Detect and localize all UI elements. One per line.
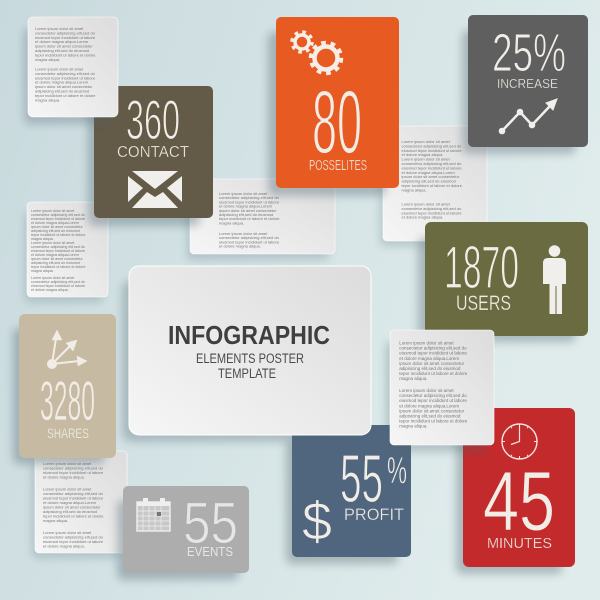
note: left middle: eiusmod tepor incididunt ut labore: [31, 217, 85, 221]
number: 55: 55: [340, 441, 383, 517]
note: left middle: et dolore magna aliqua.Lorem: [31, 221, 79, 225]
note: right top: eiusmod tepor incididunt ut labore: [402, 148, 462, 153]
note: lower left: adipisicing elit,sed do eiusmod: [43, 509, 97, 514]
card: 45 minutes: [456, 408, 575, 574]
note: left middle: Lorem ipsum dolor sit amet: [31, 241, 74, 245]
card: 55% profit: [286, 425, 411, 564]
note: top left: Lorem ipsum dolor sit amet: [35, 26, 84, 31]
note: lower right panel: consectetur adipisicing elit,sed do: [399, 393, 467, 398]
note: lower right panel: Lorem ipsum dolor sit amet: [399, 388, 454, 393]
note: lower right panel: eiusmod tepor incididunt ut labore: [399, 351, 467, 356]
card: 80 posselites: [268, 17, 399, 196]
note: right top: et dolore magna aliqua.: [402, 152, 443, 157]
note: lower left: consectetur adipisicing elit,sed do: [43, 466, 104, 470]
note: lower right panel: adipisicing elit,sed do eiusmod: [399, 414, 461, 418]
note: lower left: Lorem ipsum dolor sit amet: [43, 461, 92, 466]
note: top left: ipsum dolor sit amet consectetur: [35, 84, 93, 89]
icon: branching arrows: [48, 330, 87, 368]
note: lower right panel: Lorem ipsum dolor sit amet: [399, 340, 454, 346]
note: right top: [380, 126, 487, 246]
note: left middle: tepor incididunt ut labore et dolore: [31, 265, 85, 269]
note: centre top: ipsum dolor sit amet consectetur: [219, 208, 277, 213]
note: left middle: Lorem ipsum dolor sit amet: [31, 209, 74, 213]
note: centre top: tepor incididunt ut labore et dolore: [219, 216, 280, 221]
number: 45: 45: [483, 454, 555, 548]
note: lower left: magna aliqua.: [43, 518, 68, 523]
note: right top: ipsum dolor sit amet consectetur: [402, 174, 460, 179]
note: lower left: et dolore magna aliqua.Lorem: [43, 500, 97, 505]
note: left middle: adipisicing elit,sed do eiusmod: [31, 261, 80, 265]
note: top left: ipsum dolor sit amet consectetur: [35, 44, 93, 49]
number: 1870: 1870: [444, 234, 519, 301]
icon: person: [543, 245, 566, 314]
card: 3280 shares: 3280: [40, 369, 95, 432]
note: centre top: Lorem ipsum dolor sit amet: [219, 231, 268, 236]
icon: dollar: $: [302, 492, 332, 552]
label: shares: SHARES: [47, 425, 89, 441]
note: right top: Lorem ipsum dolor sit amet: [402, 139, 451, 144]
note: left middle: ipsum dolor sit amet consectetur: [31, 225, 84, 229]
note: lower right panel: magna aliqua.: [399, 424, 428, 429]
icon: gears: [292, 32, 341, 73]
note: centre top: consectetur adipisicing elit,sed do: [219, 235, 280, 240]
note: lower right panel: eiusmod tepor incididunt ut labore: [399, 398, 467, 403]
note: lower left: eiusmod tepor incididunt ut labore: [43, 470, 104, 475]
card: 25% increase: [462, 15, 588, 154]
note: left middle: et dolore magna aliqua.: [31, 288, 69, 292]
label: events: EVENTS: [187, 545, 233, 559]
note: top left: consectetur adipisicing elit,sed do: [35, 30, 96, 35]
note: right top: adipisicing elit,sed do eiusmod: [402, 179, 456, 184]
note: left middle: magna aliqua.: [31, 237, 54, 241]
note: lower left: tepor incididunt ut labore et dolore: [43, 514, 104, 518]
icon: envelope: [128, 171, 182, 208]
note: right top: et dolore magna aliqua.Lorem: [402, 170, 455, 175]
note: centre top: magna aliqua.: [219, 220, 244, 225]
label: contact: CONTACT: [117, 144, 190, 161]
note: left middle: [25, 202, 108, 302]
icon: calendar: [137, 498, 170, 531]
note: top left: tepor incididunt ut labore et dolore: [35, 93, 96, 98]
card: 80 posselites: 80: [312, 73, 362, 173]
note: left middle: consectetur adipisicing elit,sed do: [31, 213, 85, 217]
note: lower left: consectetur adipisicing elit,sed do: [43, 534, 104, 540]
note: centre top: Lorem ipsum dolor sit amet: [219, 191, 268, 196]
note: top left: adipisicing elit,sed do eiusmod: [35, 48, 89, 53]
note: right top: et dolore magna aliqua.: [402, 215, 443, 220]
note: top left: consectetur adipisicing elit,sed do: [35, 71, 96, 76]
note: lower right panel: tepor incididunt ut labore et dolore: [399, 419, 468, 424]
note: lower left: eiusmod tepor incididunt ut labore: [43, 496, 104, 500]
note: top left: magna aliqua.: [35, 97, 60, 102]
note: lower left: et dolore magna aliqua.: [43, 544, 85, 548]
note: left middle: eiusmod tepor incididunt ut labore: [31, 249, 85, 253]
note: lower right panel: consectetur adipisicing elit,sed do: [399, 346, 467, 351]
note: centre top: eiusmod tepor incididunt ut labore: [219, 239, 280, 244]
note: centre top: et dolore magna aliqua.Lorem: [219, 204, 273, 209]
card: 1870 users: [418, 222, 588, 342]
note: left middle: adipisicing elit,sed do eiusmod: [31, 229, 80, 233]
subheading line two: TEMPLATE: [218, 366, 276, 381]
note: right top: consectetur adipisicing elit,sed do: [402, 206, 462, 211]
note: lower right panel: tepor incididunt ut labore et dolore: [399, 371, 468, 376]
note: lower left: et dolore magna aliqua.: [43, 474, 85, 480]
note: lower left: [32, 451, 127, 558]
note: right top: consectetur adipisicing elit,sed do: [402, 143, 462, 148]
note: lower right panel: et dolore magna aliqua.Lorem: [399, 356, 459, 361]
subheading line one: ELEMENTS POSTER: [196, 351, 304, 366]
label: users: USERS: [456, 292, 511, 315]
note: top left: et dolore magna aliqua.Lorem: [35, 80, 89, 85]
note: top left: et dolore magna aliqua.Lorem: [35, 39, 89, 44]
note: right top: Lorem ipsum dolor sit amet: [402, 157, 451, 162]
note: left middle: ipsum dolor sit amet consectetur: [31, 257, 84, 261]
note: top left: eiusmod tepor incididunt ut labore: [35, 75, 96, 80]
icon: clock: [502, 424, 537, 459]
note: lower left: ipsum dolor sit amet consectetur: [43, 504, 101, 510]
heading: INFOGRAPHIC: [168, 320, 330, 350]
note: top left: Lorem ipsum dolor sit amet: [35, 66, 84, 72]
note: right top: tepor incididunt ut labore et dolore: [402, 183, 463, 188]
note: lower left: Lorem ipsum dolor sit amet: [43, 530, 92, 535]
note: lower right panel: adipisicing elit,sed do eiusmod: [399, 366, 461, 371]
note: top left: magna aliqua.: [35, 57, 60, 62]
note: centre top: [187, 179, 335, 260]
note: lower right panel: et dolore magna aliqua.Lorem: [399, 403, 459, 408]
icon: rising line arrow: [499, 99, 557, 134]
card: 360 contact: [88, 86, 213, 226]
note: lower right panel: ipsum dolor sit amet consectetur: [399, 408, 465, 413]
number: 360: 360: [126, 88, 180, 151]
label: minutes: MINUTES: [487, 535, 552, 552]
label: posselites: POSSELITES: [309, 157, 367, 174]
label: profit: PROFIT: [344, 505, 404, 524]
number: 25%: 25%: [492, 23, 566, 83]
note: right top: consectetur adipisicing elit,sed do: [402, 161, 462, 166]
note: centre top: eiusmod tepor incididunt ut labore: [219, 199, 280, 204]
card: 3280 shares: [13, 314, 116, 464]
note: centre top: adipisicing elit,sed do eiusmod: [219, 212, 273, 217]
note: top left: adipisicing elit,sed do eiusmod: [35, 88, 89, 94]
note: left middle: tepor incididunt ut labore et dolore: [31, 233, 85, 237]
note: left middle: et dolore magna aliqua.Lorem: [31, 253, 79, 257]
note: centre top: et dolore magna aliqua.: [219, 244, 261, 249]
note: lower left: eiusmod tepor incididunt ut labore: [43, 539, 104, 544]
label: increase: INCREASE: [497, 76, 558, 91]
card: 55 events: [117, 486, 249, 580]
note: left middle: Lorem ipsum dolor sit amet: [31, 276, 74, 280]
note: right top: eiusmod tepor incididunt ut labore: [402, 210, 462, 215]
note: top left: eiusmod tepor incididunt ut labore: [35, 35, 96, 40]
note: lower left: Lorem ipsum dolor sit amet: [43, 486, 92, 492]
note: right top: magna aliqua.: [402, 187, 427, 192]
note: left middle: consectetur adipisicing elit,sed do: [31, 245, 85, 249]
percent sign: %: [387, 450, 407, 492]
note: left middle: consectetur adipisicing elit,sed do: [31, 280, 85, 284]
note: top left: tepor incididunt ut labore et dolore: [35, 52, 96, 57]
main title panel: [122, 266, 371, 442]
note: lower right panel: [386, 330, 494, 452]
note: centre top: consectetur adipisicing elit,sed do: [219, 195, 280, 200]
note: left middle: eiusmod tepor incididunt ut labore: [31, 284, 85, 288]
note: lower right panel: magna aliqua.: [399, 376, 428, 381]
note: left middle: magna aliqua.: [31, 269, 54, 273]
note: top left: [24, 17, 118, 124]
number: 55: 55: [183, 491, 238, 556]
note: right top: eiusmod tepor incididunt ut labore: [402, 165, 462, 170]
note: lower left: consectetur adipisicing elit,sed do: [43, 491, 104, 496]
note: lower right panel: ipsum dolor sit amet consectetur: [399, 361, 465, 366]
note: right top: Lorem ipsum dolor sit amet: [402, 202, 451, 206]
